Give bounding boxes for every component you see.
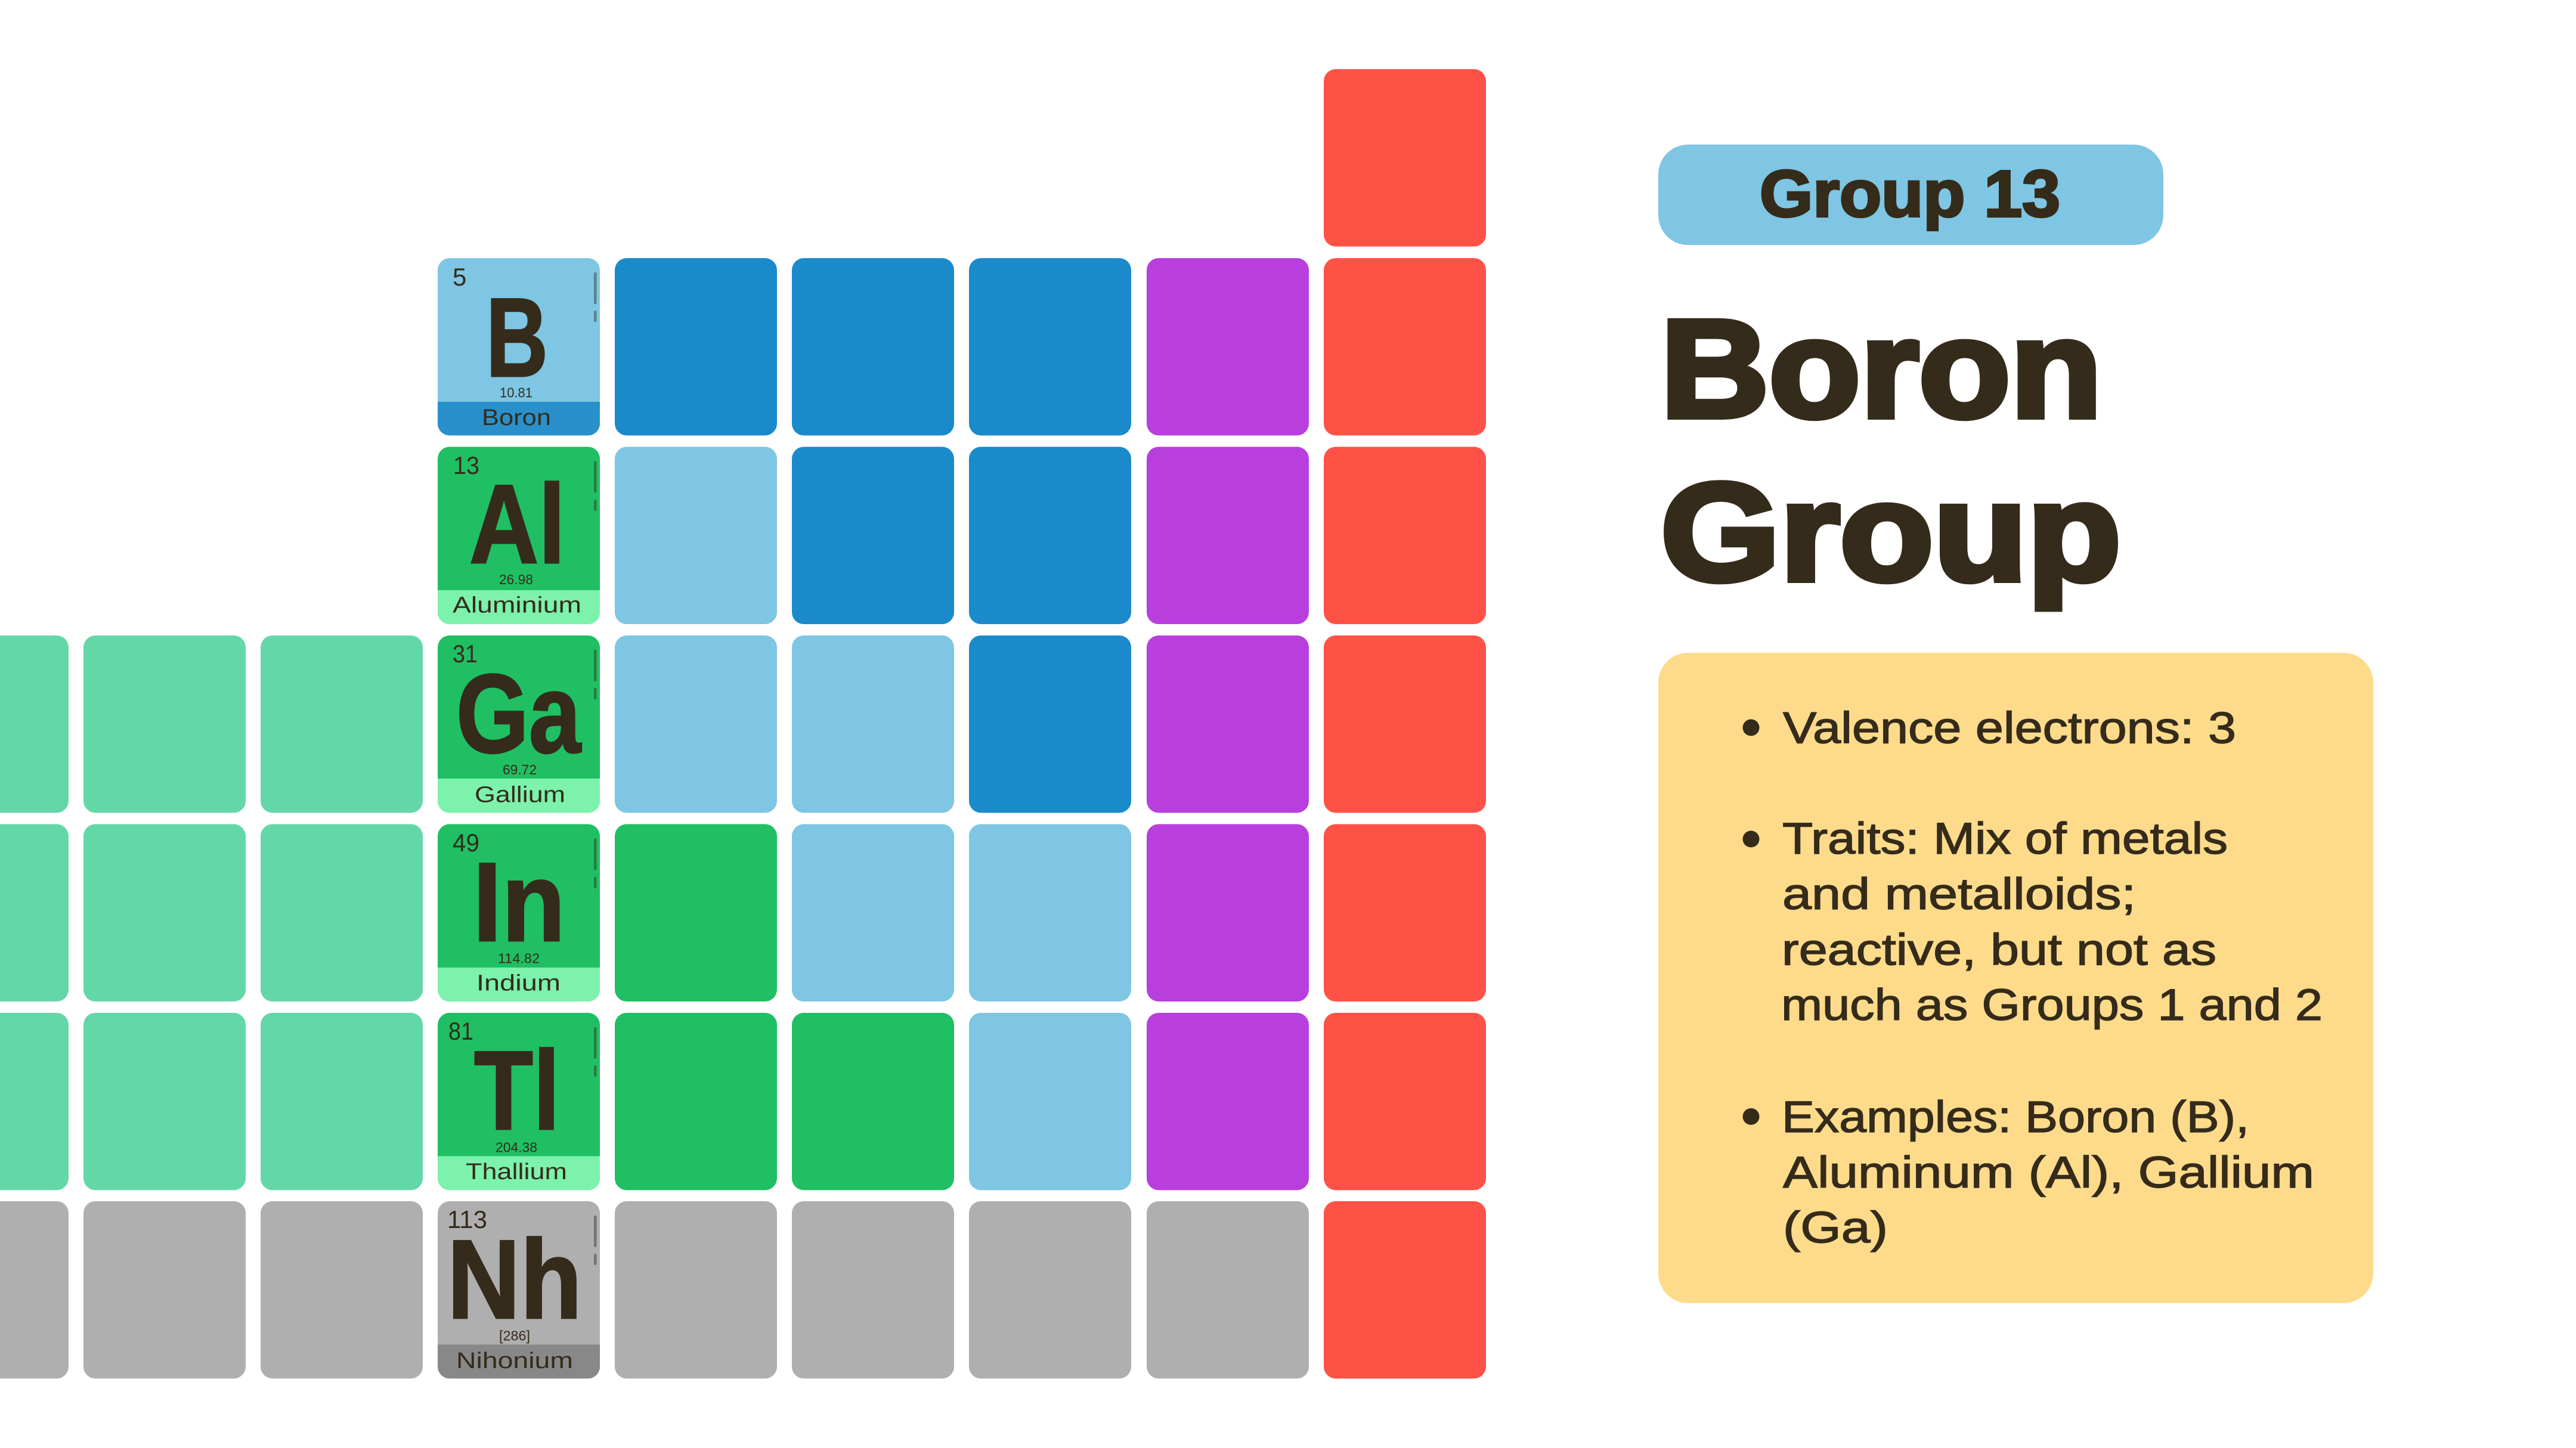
element card: Indium: Indium [476,970,561,996]
bullet: traits [1742,814,2323,1030]
element card: Aluminium: 26.98 [499,572,533,587]
bullet: examples: Aluminum (Al), Gallium [1783,1148,2314,1197]
background cells: green post-transition metals [615,824,954,1190]
bullet: traits: much as Groups 1 and 2 [1781,980,2323,1030]
element card: Aluminium: 13 [453,451,479,479]
background cells: light blue metalloids [615,447,1131,1190]
element card: Nihonium: Nh [447,1217,582,1342]
background cells: dark blue nonmetals [615,258,1131,813]
title [1661,292,2121,610]
element card: Boron [438,258,600,435]
element card: Indium: 49 [453,829,479,857]
element card: Gallium: Gallium [475,782,565,807]
bullet: examples: Examples: Boron (B), [1782,1092,2249,1142]
title: Boron [1661,292,2102,447]
element card: Gallium [438,635,600,813]
info panel: group properties [1658,653,2373,1303]
bullet: valence electrons: Valence electrons: 3 [1783,703,2236,752]
element card: Thallium [438,1013,600,1190]
element card: Indium: 114.82 [498,950,540,966]
element card: Thallium: 204.38 [496,1140,537,1155]
element card: Boron: 10.81 [500,385,532,401]
element card: Boron: Boron [482,405,551,430]
bullet: traits: and metalloids; [1782,869,2136,919]
element card: Thallium: Thallium [466,1159,567,1185]
element card: Gallium: 69.72 [503,762,537,777]
bullet: examples [1742,1092,2314,1252]
background cells: mint transition metals [0,635,423,1190]
bullet: examples: (Ga) [1783,1203,1888,1252]
element card: Aluminium [438,447,600,624]
element card: Thallium: 81 [448,1017,473,1045]
element card: Gallium: 31 [453,640,478,668]
element card: Boron: B [486,275,548,400]
element card: Nihonium: Nihonium [456,1348,573,1373]
title: Group [1661,455,2121,610]
element card: Thallium: Tl [474,1028,560,1153]
element card: Nihonium: [286] [499,1328,530,1344]
element card: Indium: In [473,839,565,965]
element card: Gallium: Ga [456,651,581,776]
group badge [1658,144,2163,245]
background cells: red noble gases [1324,69,1486,1378]
background cells: purple halogens [1147,258,1309,1190]
periodic table section [0,69,1486,1378]
element card: Indium [438,824,600,1001]
element card: Aluminium: Al [469,461,565,587]
group badge: Group 13 [1760,157,2060,231]
background cells: grey bottom row [0,1201,1309,1378]
bullet: traits: reactive, but not as [1782,925,2216,974]
element card: Nihonium [438,1201,600,1378]
element card: Aluminium: Aluminium [453,593,581,618]
element card: Nihonium: 113 [447,1205,487,1233]
bullet: traits: Traits: Mix of metals [1782,814,2228,863]
element card: Boron: 5 [453,263,466,291]
